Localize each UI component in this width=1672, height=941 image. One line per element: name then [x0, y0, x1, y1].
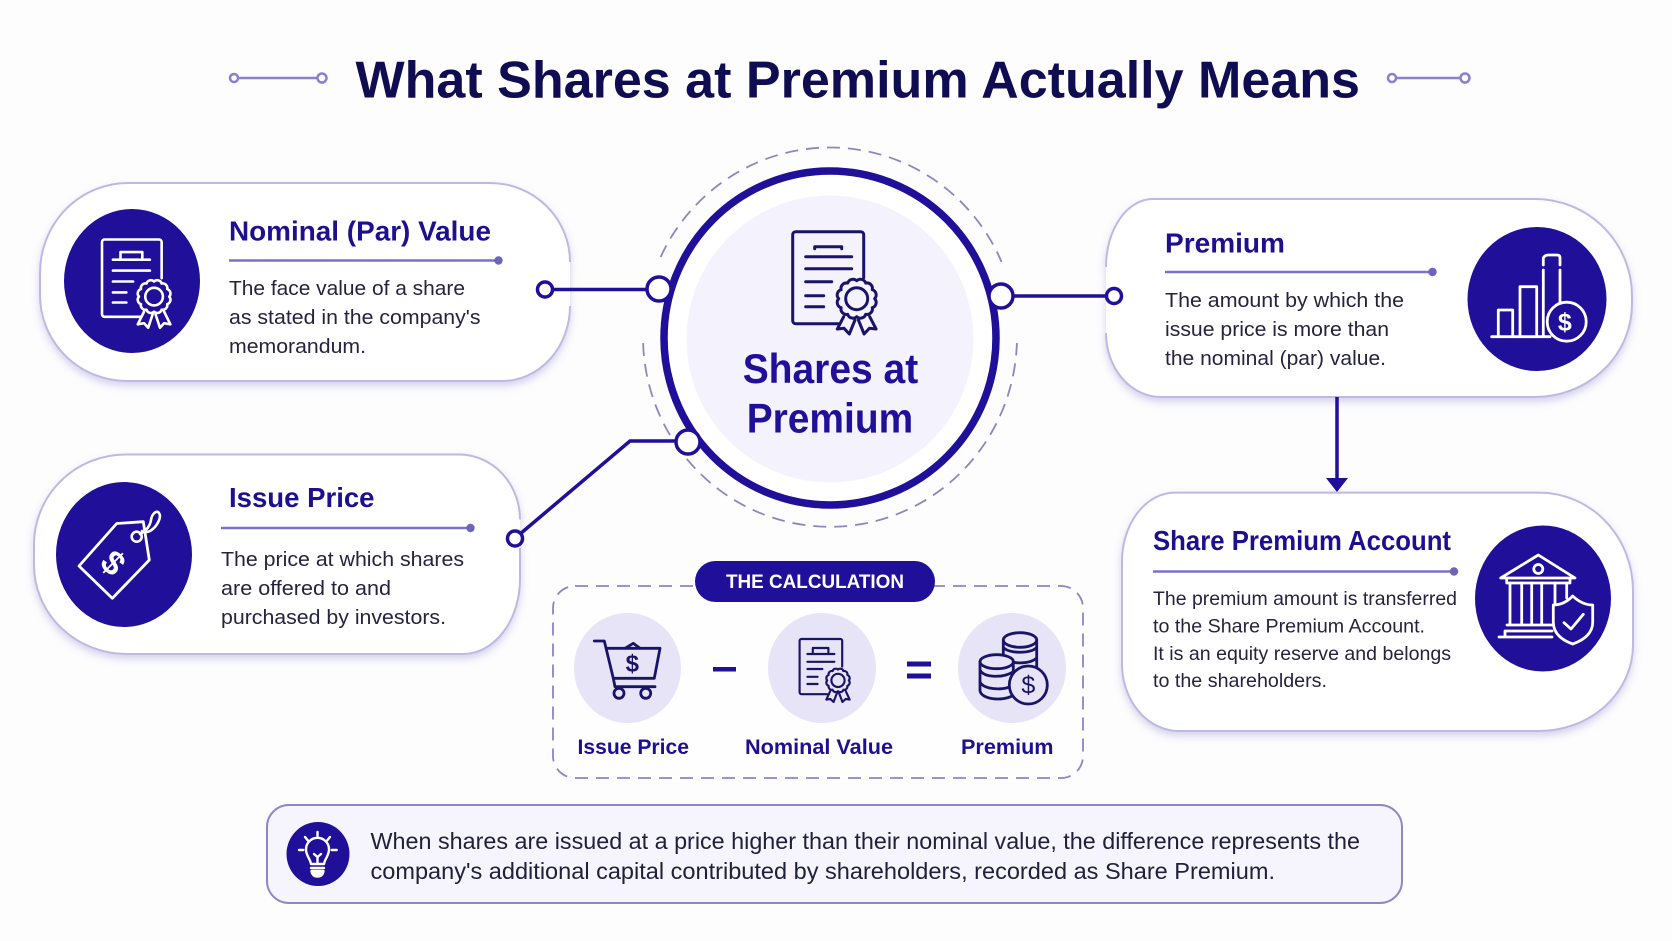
panel: the calculation — [553, 561, 1083, 778]
text: account description — [1153, 588, 1457, 692]
text: account description: The premium amount is transferred — [1153, 588, 1457, 610]
icon: light bulb — [286, 822, 350, 886]
heading: premium: Premium — [1165, 228, 1285, 258]
hub label: Shares at — [743, 345, 918, 392]
center hub: shares at premium — [643, 147, 1017, 527]
arrow: premium to share premium account — [1326, 397, 1348, 492]
text: account description: It is an equity reserve and belongs — [1153, 643, 1451, 665]
text: nominal description: as stated in the company's — [229, 306, 480, 329]
text: premium description: The amount by which the — [1165, 289, 1404, 312]
text: nominal description — [229, 277, 480, 358]
text: issue price description: The price at which shares — [221, 548, 464, 571]
panel: share premium account — [1122, 493, 1633, 731]
icon: coin stacks — [958, 613, 1066, 723]
minus sign — [713, 667, 736, 672]
connector: center to premium — [1008, 288, 1122, 304]
icon: shopping cart: $ — [626, 650, 640, 678]
icon: bar chart with coin: $ — [1558, 308, 1572, 336]
title: What Shares at Premium Actually Means — [356, 52, 1360, 110]
heading rule — [229, 256, 503, 265]
label: premium: Premium — [961, 735, 1054, 759]
title ornament: left — [230, 74, 326, 82]
heading rule — [1153, 567, 1458, 576]
icon: certificate — [768, 613, 876, 723]
panel: nominal value — [40, 183, 570, 381]
panel: premium — [1106, 199, 1632, 397]
text: key note: company's additional capital contributed by shareholders, recorded as Share Premium. — [370, 858, 1275, 884]
heading: share premium account: Share Premium Account — [1153, 525, 1451, 556]
text: issue price description: purchased by investors. — [221, 606, 446, 629]
title ornament: right — [1388, 74, 1470, 82]
heading rule — [1165, 268, 1437, 276]
text: premium description: issue price is more than — [1165, 318, 1389, 341]
text: nominal description: memorandum. — [229, 335, 366, 358]
icon: shopping cart — [574, 613, 681, 723]
label: issue price: Issue Price — [578, 735, 689, 759]
heading: issue price: Issue Price — [229, 482, 374, 513]
text: premium description — [1165, 289, 1404, 370]
text: key note — [370, 828, 1360, 884]
connector: issue price to center — [508, 441, 680, 546]
text: account description: to the shareholders. — [1153, 670, 1327, 692]
icon: price tag: $ — [93, 543, 133, 583]
icon: price tag — [56, 482, 192, 627]
hub label — [743, 345, 918, 442]
inner disc — [686, 196, 974, 482]
hub connector nodes — [647, 277, 1013, 454]
heading rule — [221, 524, 475, 532]
label: nominal value: Nominal Value — [745, 735, 893, 759]
badge: the calculation: THE CALCULATION — [726, 571, 904, 593]
connector: nominal value to center — [538, 282, 650, 297]
icon: coin stacks: $ — [1021, 672, 1035, 700]
hub label: Premium — [747, 394, 913, 442]
equals sign — [907, 662, 931, 678]
text: nominal description: The face value of a share — [229, 277, 465, 300]
text: issue price description — [221, 548, 464, 629]
icon: certificate on navy circle — [64, 209, 200, 353]
dashed orbit ring — [643, 147, 1017, 527]
icon: bank with shield — [1475, 526, 1611, 672]
callout: key note — [267, 805, 1402, 903]
text: account description: to the Share Premium Account. — [1153, 616, 1425, 638]
panel: issue price — [34, 454, 520, 654]
text: issue price description: are offered to and — [221, 577, 391, 600]
icon: certificate — [793, 232, 876, 334]
heading: nominal value: Nominal (Par) Value — [229, 216, 491, 246]
main ring — [664, 171, 996, 505]
badge: the calculation — [695, 561, 935, 602]
text: key note: When shares are issued at a price higher than their nominal value, the difference represents the — [370, 828, 1360, 854]
text: premium description: the nominal (par) value. — [1165, 347, 1386, 370]
icon: bar chart with coin — [1468, 227, 1606, 371]
